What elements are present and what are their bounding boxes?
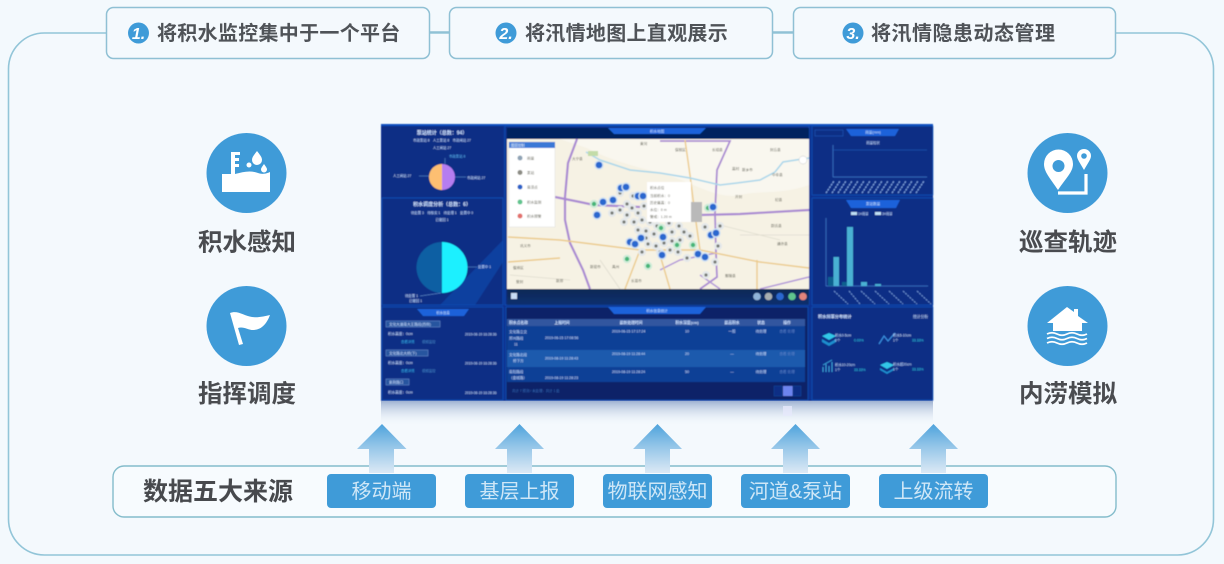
panel: reports list: 视频监控 (422, 368, 436, 373)
map canvas: 杞县 (775, 197, 783, 202)
arrow 5 (909, 424, 958, 473)
table header: 积水点名称 (509, 320, 528, 325)
panel: station statistics: 市政泵站 8 人工泵站 8 市政闸站 27 (413, 138, 471, 142)
panel: station statistics: 市政泵站 8 (449, 154, 466, 158)
map canvas: 禹州 (612, 264, 620, 269)
stat 1 (822, 332, 864, 346)
map canvas: 登封 (516, 279, 524, 284)
source: 基层上报 (465, 474, 574, 508)
table header: 上报时间 (554, 320, 570, 325)
stat 3: 33.33% (854, 368, 866, 372)
panel: map (505, 126, 809, 305)
stat 1: 积水0-5cm (835, 332, 851, 338)
panel: bar chart: 泵站数量 (866, 201, 881, 206)
panel: reports list: 积水信息 (436, 310, 450, 315)
heading 2: 2. (498, 26, 513, 43)
stat 4: 1个 (893, 366, 899, 372)
map: popup: 警戒：1.20 m (650, 214, 672, 219)
source: 上级流转 (879, 474, 988, 508)
panel: reports list: 2019-08-19 16:28:36 (465, 332, 497, 336)
panel: reports list: 积水高度：0cm (388, 331, 413, 336)
table rows: — (730, 370, 734, 374)
map canvas: 高村 (732, 166, 740, 171)
panel: reports list (382, 307, 503, 400)
stat 1: 0.00% (854, 338, 864, 342)
table rows: 2019-08-19 11:28:43 (545, 356, 578, 360)
table rows: 南阳路段 (509, 369, 524, 374)
data sources bar (113, 466, 1116, 517)
panel: station statistics: 人工闸站 27 (393, 173, 411, 178)
table rows: — (730, 352, 734, 356)
panel: waterlogging dispatch: 待处置 3 待核实 1 待处理 1 处置中 0 (411, 210, 473, 215)
map: menu card: 积水预警 (527, 214, 542, 218)
panel: map: 积水地图 (650, 128, 665, 134)
feature: 巡查轨迹: 巡查轨迹 (1019, 228, 1117, 256)
map: popup: 积水点位 (650, 185, 665, 190)
panel: reports list: 2019-08-19 16:28:36 (465, 391, 497, 395)
panel: records table: 共计 7 预测 / 未处理：共计 1 处 (512, 388, 560, 393)
map canvas: 黄河 (640, 141, 648, 146)
panel: reports list: 文化路北大桥(下) (389, 350, 417, 356)
panel: waterlogging dispatch (382, 198, 503, 305)
arrow 3 (633, 424, 682, 473)
table header: 最新处理时间 (620, 320, 643, 325)
source: 河道&泵站 (741, 474, 850, 508)
stat 3: 积水10-20cm (835, 362, 855, 367)
arrow 1 (357, 424, 406, 473)
heading 1 (106, 8, 430, 58)
heading 1: 1. (132, 26, 145, 43)
source: 物联网感知: 物联网感知 (608, 480, 708, 503)
heading 1: 将积水监控集中于一个平台 (157, 21, 401, 45)
panel: station statistics: 人工闸站 27 (433, 145, 451, 150)
pie: dispatch share (417, 242, 468, 293)
panel: station statistics: 泵站统计（总数：94） (417, 130, 467, 136)
map footer bar (507, 289, 809, 305)
heading 3 (794, 8, 1116, 58)
panel: reports list: 紫荆路口 (389, 380, 404, 384)
panel: waterlogging dispatch: 已撤回 1 (436, 217, 449, 222)
arrow 2 (495, 424, 544, 473)
table rows: 文化路北段 (509, 352, 527, 357)
table header (507, 319, 805, 326)
data sources bar: 数据五大来源 (143, 478, 293, 506)
table rows: 50 (685, 370, 689, 374)
stat 4: 33.33% (912, 368, 924, 372)
table rows: 待处理 (756, 328, 767, 334)
map: menu card: 泵站 (527, 170, 535, 175)
feature: 指挥调度: 指挥调度 (198, 380, 296, 408)
panel: bar chart (812, 198, 933, 305)
table rows: 2019-08-19 11:28:44 (612, 352, 645, 356)
table rows: 文化路立交 (509, 329, 527, 334)
map: popup (647, 182, 691, 222)
feature: 内涝模拟: 内涝模拟 (1019, 380, 1117, 408)
map canvas: 大宁县 (572, 156, 583, 161)
panel: records table: 积水信息统计 (646, 308, 668, 313)
stat 2 (879, 332, 924, 344)
panel: reports list: 文化大道南大王路段(西侧) (389, 322, 431, 326)
panel: station statistics (382, 126, 503, 197)
source: 上级流转: 上级流转 (894, 480, 974, 503)
map canvas: 中牟县 (772, 172, 783, 177)
panel: waterlogging dispatch: 处置中 1 (478, 264, 491, 269)
source: 河道&泵站: 河道&泵站 (749, 480, 842, 503)
map: menu card: 易涝点 (527, 184, 538, 190)
heading 3: 3. (846, 26, 860, 43)
table rows: 待处理 (756, 369, 767, 374)
map: popup: 当前积水：0 (650, 193, 670, 198)
table rows: 桥下方 (513, 358, 524, 363)
source: 物联网感知 (603, 474, 712, 508)
panel: reports list: 积水高度：0cm (388, 360, 413, 365)
table rows: 待处理 (756, 351, 767, 356)
feature: 内涝模拟 (1019, 286, 1117, 408)
panel: waterlogging dispatch: 积水调度分析（总数：6） (413, 201, 471, 208)
table rows: 郑州路段 (509, 336, 524, 340)
stat 4: 积水超20cm (893, 362, 912, 366)
dashboard reflection (381, 401, 933, 426)
panel: depth distribution stats (812, 307, 933, 400)
source: 基层上报: 基层上报 (480, 480, 560, 503)
map canvas: 尉氏县 (771, 223, 782, 228)
heading 3: 将汛情隐患动态管理 (871, 21, 1056, 45)
map: grey station markers (609, 190, 723, 278)
map: menu card: 雨量 (527, 156, 535, 160)
table rows: 20 (685, 352, 689, 356)
table header: 最高积水 (724, 320, 740, 325)
table rows: 10 (685, 330, 689, 334)
panel: bar chart: 3H雨量 (882, 211, 893, 216)
stat 1: 0个 (835, 338, 841, 342)
heading 2: 将汛情地图上直观展示 (525, 22, 728, 45)
feature: 积水感知: 积水感知 (198, 228, 296, 256)
table rows: 查看 处理 (779, 328, 795, 334)
map canvas: 巩义市 (520, 243, 531, 248)
map canvas: 长垣县 (712, 147, 723, 152)
source: 移动端 (327, 474, 436, 508)
table rows: 查看 处理 (779, 369, 795, 374)
panel: reports list: 查看详情 (401, 339, 415, 344)
panel: station statistics: 市政闸站 27 (467, 175, 485, 180)
panel: reports list: 积水高度：0cm (388, 390, 413, 394)
table rows: 11 (514, 342, 518, 346)
panel: reports list: 视频监控 (422, 339, 436, 344)
panel: reports list: 2019-08-19 16:28:36 (465, 362, 497, 366)
source: 移动端: 移动端 (352, 480, 412, 503)
panel: waterlogging dispatch: 已撤回 1 (409, 298, 422, 303)
table rows: 一般 (728, 328, 736, 334)
stat 2: 积水5-10cm (893, 332, 911, 338)
table rows (507, 326, 805, 382)
map canvas: 鄢陵县 (725, 273, 736, 278)
map canvas: 新乡市 (742, 167, 753, 172)
stat 3: 1个 (835, 367, 841, 372)
panel: rainfall chart: 雨量(mm) (865, 130, 881, 134)
table header: 操作 (783, 320, 791, 325)
pagination (774, 386, 801, 396)
panel: depth distribution stats: 积水频率分布统计 (818, 313, 852, 320)
panel: records table (506, 307, 808, 400)
table rows: 2019-06-15 17:08:56 (545, 336, 578, 340)
panel: bar chart: 1H雨量 (858, 211, 869, 216)
pie: station share (429, 164, 455, 190)
stat 2: 1个 (893, 338, 899, 342)
map canvas: 新密市 (590, 264, 601, 269)
stat 4 (880, 362, 924, 374)
map canvas: 新郑 (556, 278, 564, 283)
top headings (106, 8, 1116, 58)
map: popup: 水位：0 m (650, 207, 667, 212)
table header: 状态 (757, 320, 765, 325)
map: blue markers (593, 161, 720, 261)
feature: 指挥调度 (198, 286, 296, 408)
map: menu card: 图层控制 (511, 142, 525, 148)
map canvas: 长葛市 (631, 278, 642, 283)
panel: depth distribution stats: 统计分析 (913, 314, 928, 319)
table rows: （金城路） (509, 375, 527, 380)
map: menu card (509, 142, 555, 227)
map: menu card: 积水监测 (527, 200, 542, 204)
panel: rainfall chart (812, 126, 933, 195)
map: green monitor markers (591, 201, 711, 269)
map canvas: 保税区 (675, 147, 686, 152)
panel: waterlogging dispatch: 待处置 1 (405, 293, 418, 298)
table rows: 2019-06-15 17:17:24 (612, 330, 645, 334)
table rows: 查看 处理 (779, 351, 795, 356)
map canvas: 偃师区 (513, 265, 524, 270)
table header: 积水深度(cm) (675, 320, 699, 325)
dashboard screenshot (381, 124, 933, 401)
map canvas: 开封 (735, 194, 743, 199)
arrow 4 (771, 424, 820, 473)
panel: rainfall chart: 雨量柱状 (866, 140, 880, 145)
feature: 巡查轨迹 (1019, 133, 1117, 256)
heading 2 (450, 8, 772, 58)
table rows: 2019-08-19 11:28:24 (612, 370, 645, 374)
table rows: 2019-08-19 11:28:23 (545, 376, 578, 380)
stat 3 (823, 360, 866, 372)
map canvas (507, 139, 809, 289)
feature: 积水感知 (198, 133, 296, 256)
map canvas: 封丘县 (770, 147, 781, 152)
stat 2: 33.33% (912, 338, 924, 342)
map: popup: 历史最高：0 (650, 200, 670, 205)
panel: reports list: 查看详情 (401, 368, 415, 373)
map canvas: 通许县 (777, 241, 788, 246)
